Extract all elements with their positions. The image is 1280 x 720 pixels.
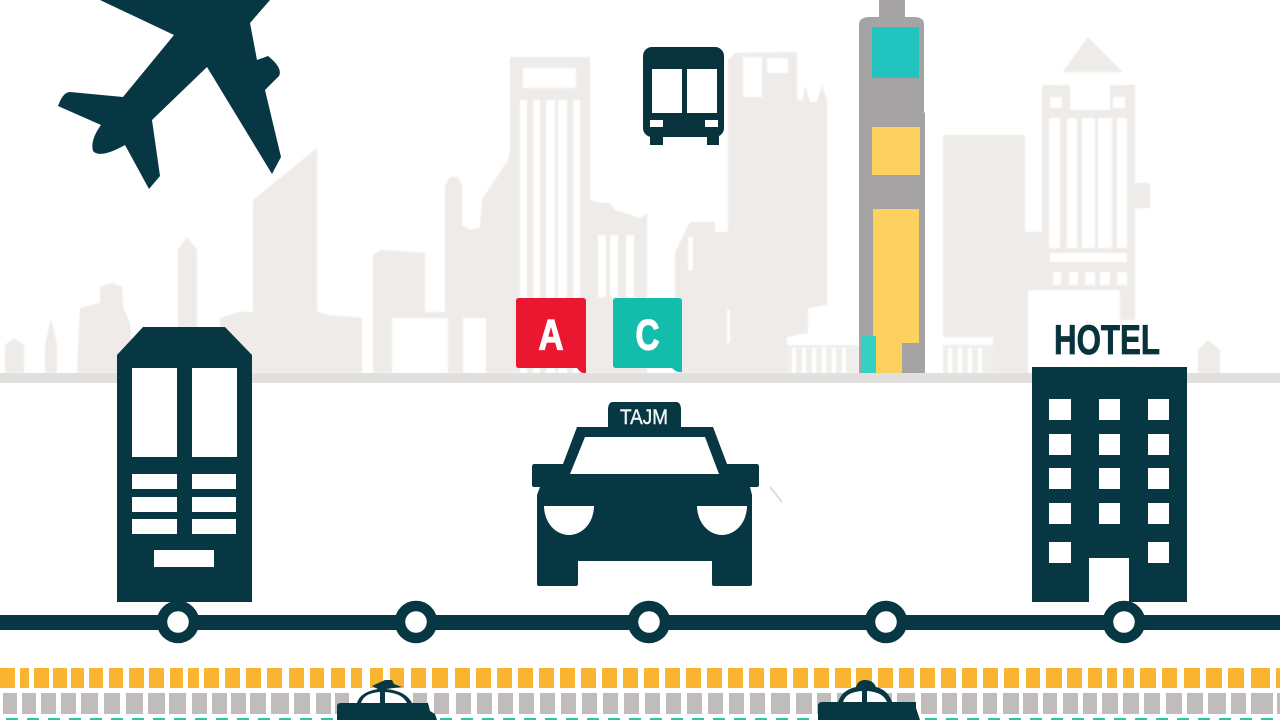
sign: C: C [636, 312, 660, 360]
traffic strip: teal row [6, 718, 1273, 720]
skyline windows [392, 57, 1165, 373]
landmark tower [859, 0, 925, 373]
icon: airplane [58, 0, 281, 189]
city skyline silhouette [5, 37, 1220, 373]
route line with stops [0, 606, 1280, 638]
sign: A [516, 298, 586, 373]
taxi roof sign text: TAJM [620, 406, 668, 429]
sign: A: A [538, 312, 564, 360]
icon: taxi [532, 402, 759, 586]
ground line [0, 373, 1280, 383]
icon: hotel building [1032, 367, 1187, 602]
traffic strip: yellow row [0, 668, 1280, 688]
icon: small taxi right [818, 680, 920, 720]
icon: metro train [117, 327, 252, 602]
sign: C [613, 298, 682, 372]
stray mark near taxi [770, 487, 782, 502]
icon: small taxi left [337, 680, 437, 720]
icon: bus [643, 47, 724, 145]
stop markers [162, 606, 1140, 638]
label: HOTEL: HOTEL [1054, 316, 1160, 363]
traffic strip: grey row [3, 693, 1280, 714]
